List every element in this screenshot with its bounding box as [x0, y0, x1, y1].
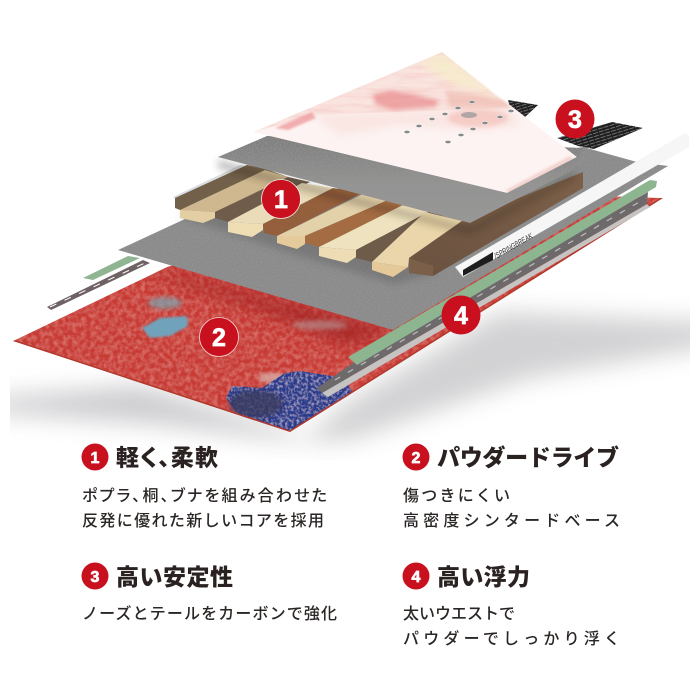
slat: poplar 5: [372, 212, 462, 277]
feature 2: [402, 444, 620, 530]
board drop shadow: [0, 312, 700, 442]
layer: carbon strip, nose: [557, 122, 643, 149]
feature 4 body: パウダーでしっかり浮く: [403, 629, 620, 648]
slat: walnut 2: [215, 177, 310, 222]
shaded felt beneath wood: [178, 200, 440, 284]
badge 1 on wood core: [262, 180, 300, 218]
badge 4 on waist: [442, 296, 480, 334]
feature 3 number icon: [82, 562, 108, 590]
layer: upper felt sheet: [218, 136, 583, 223]
feature 1 body: [82, 486, 327, 530]
layer: wood core slats: [173, 165, 583, 284]
feature 1 body: ポプラ、桐、ブナを組み合わせた: [82, 486, 327, 505]
feature 2 number icon: [402, 444, 430, 470]
feature 4 body: 太いウエストで: [403, 605, 515, 623]
strip: gray sawtooth edge, right: [317, 192, 650, 397]
badge 3 on carbon: 3: [568, 106, 582, 134]
layer: white sidewall strip with logo: [455, 133, 689, 277]
feature 4 heading: 高い浮力: [437, 564, 530, 590]
feature 1 body: 反発に優れた新しいコアを採用: [82, 512, 324, 530]
badge 1 on wood core: 1: [274, 186, 288, 214]
core rim: [173, 165, 250, 199]
shadow under upper felt: [218, 160, 575, 234]
feature 2 number icon: 2: [412, 450, 421, 467]
layer: carbon strip, rear small: [508, 100, 538, 117]
slat: walnut 4: [356, 211, 445, 262]
feature 3 number icon: 3: [91, 569, 100, 586]
feature 2 body: 傷つきにくい: [403, 487, 510, 505]
slat: walnut 1: [175, 165, 288, 212]
strip: green edge, left: [83, 256, 140, 280]
badge 3 on carbon: [556, 100, 594, 138]
feature 3 heading: 高い安定性: [116, 564, 233, 590]
feature 4 number icon: 4: [412, 569, 421, 586]
badge 2 on base: [200, 318, 238, 356]
feature 2 body: [403, 487, 620, 530]
slat: cherry 3: [263, 188, 362, 236]
feature 4 number icon: [402, 562, 430, 590]
feature 1: [82, 444, 327, 530]
feature 4 body: [403, 605, 620, 648]
slat: walnut 5: [409, 172, 583, 276]
layer: red base with artwork: [13, 190, 663, 432]
feature 4: [402, 562, 620, 648]
badge 2 on base: 2: [212, 324, 226, 352]
feature 2 heading: パウダードライブ: [437, 444, 619, 470]
feature 2 body: 高密度シンタードベース: [403, 512, 620, 530]
badge 4 on waist: 4: [454, 302, 468, 330]
layer: top sheet with artwork: [253, 52, 577, 194]
slat: cherry 4: [305, 200, 403, 247]
feature 3 body: ノーズとテールをカーボンで強化: [82, 604, 337, 623]
slat: poplar 3: [277, 193, 388, 249]
slat: poplar 4: [319, 205, 430, 263]
top sheet inserts: [404, 100, 514, 144]
layer: lower felt sheet: [118, 147, 668, 330]
feature 1 number icon: 1: [91, 450, 100, 467]
feature 1 heading: 軽く、柔軟: [116, 444, 218, 470]
slat: poplar 2: [228, 183, 333, 237]
exploded board layers: [13, 52, 689, 432]
feature 1 number icon: [82, 444, 108, 470]
strip: gray sawtooth edge, left: [47, 260, 150, 310]
strip: green edge, right: [348, 180, 657, 365]
slat: poplar 1: [180, 170, 288, 223]
sidewall logo text: /SPRINGBREAK: [492, 231, 535, 261]
sidewall logo block: [463, 252, 493, 276]
feature 3: [82, 562, 337, 623]
